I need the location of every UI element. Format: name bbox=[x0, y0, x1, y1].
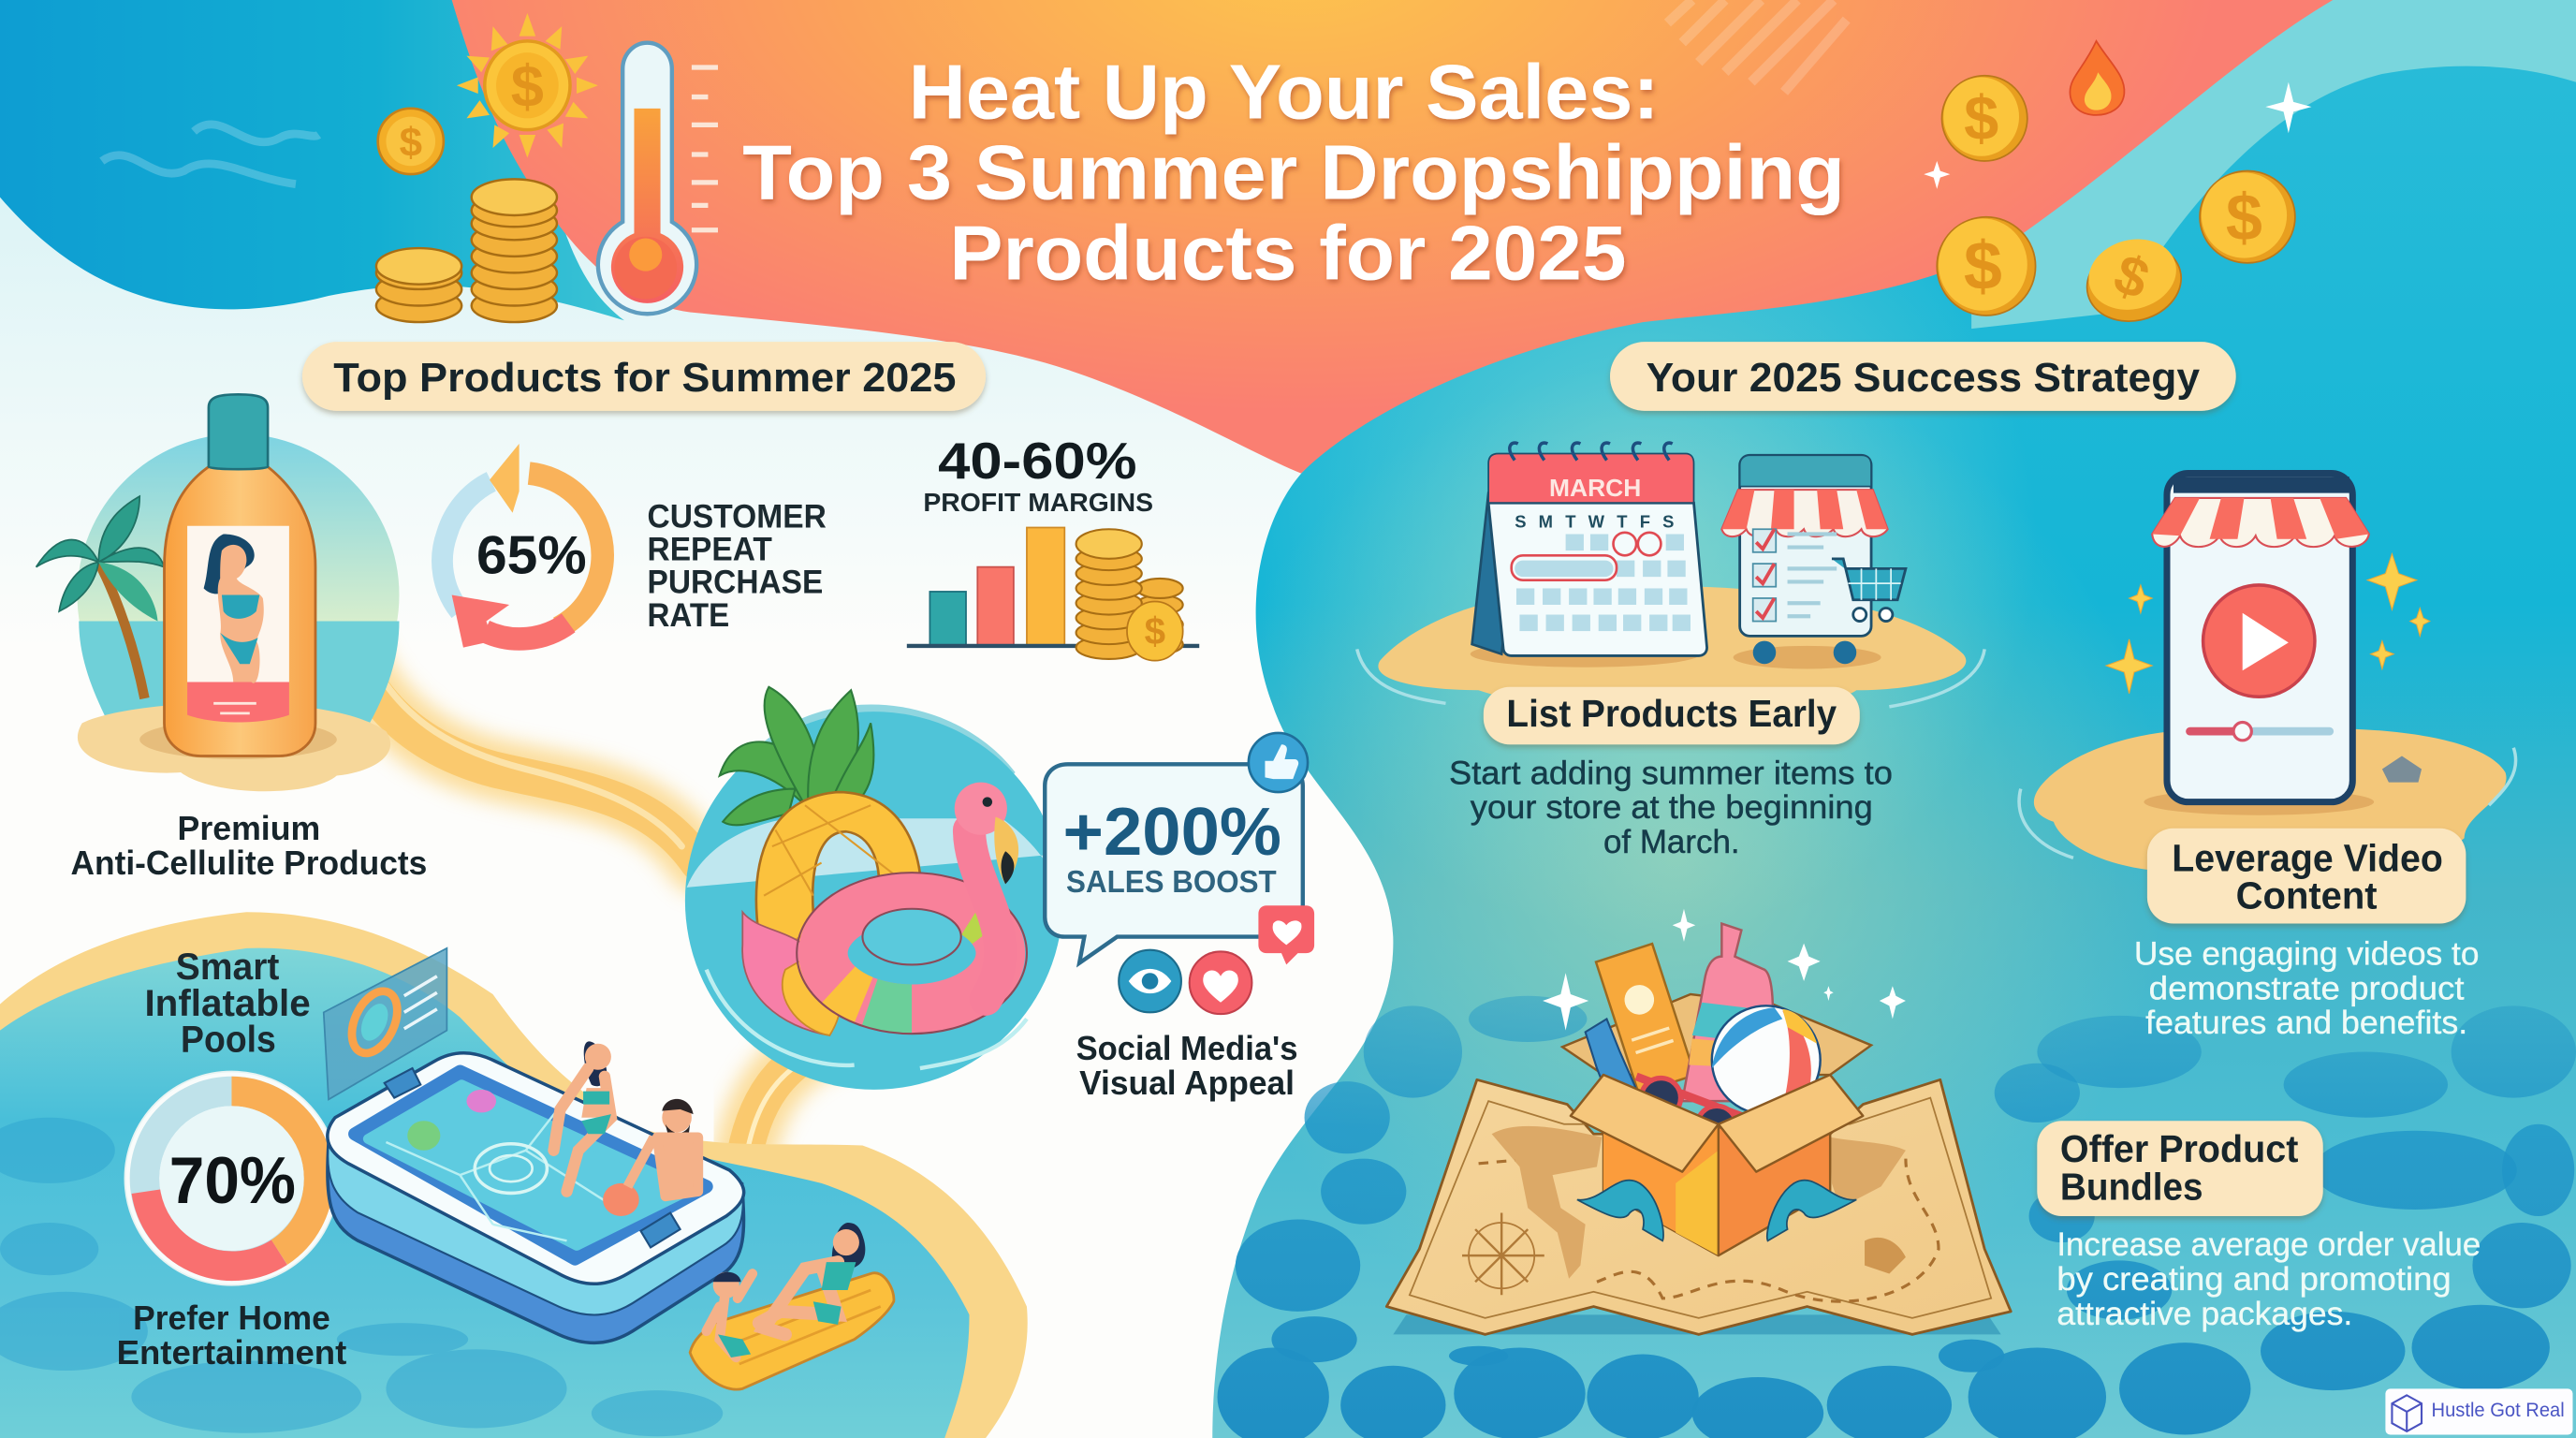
island bbox=[2034, 728, 2507, 873]
icon: falling gold coins: $ bbox=[1964, 227, 2002, 304]
text: list products description: your store at the beginning bbox=[1471, 789, 1873, 826]
dashed route bbox=[1479, 1159, 1939, 1301]
text: social media visual appeal: Social Media's bbox=[1076, 1029, 1298, 1067]
heading: top products: Top Products for Summer 2025 bbox=[333, 355, 956, 401]
illustration: inflatable pool with people bbox=[328, 1041, 894, 1389]
video slider bbox=[2190, 729, 2243, 734]
watermark badge bbox=[2385, 1388, 2572, 1434]
text: leverage video description: demonstrate product bbox=[2149, 970, 2465, 1006]
label: offer product bundles: Offer Product bbox=[2060, 1127, 2298, 1170]
callout: sales boost speech bubble: SALES BOOST bbox=[1066, 865, 1277, 900]
text: leverage video description: features and benefits. bbox=[2145, 1005, 2467, 1041]
control modules bbox=[385, 1068, 420, 1098]
icon: thermometer bbox=[598, 43, 718, 314]
store wheels bbox=[1753, 641, 1776, 664]
blue bottle bbox=[1586, 1019, 1656, 1151]
calendar page bbox=[1488, 503, 1707, 655]
text: customer repeat purchase rate: RATE bbox=[648, 597, 729, 634]
heading: success strategy bbox=[1610, 342, 2236, 411]
chart: 70% donut bbox=[124, 1072, 339, 1285]
pineapple ring bbox=[756, 792, 921, 986]
colored wing bbox=[742, 912, 840, 1035]
text: offer bundles description: by creating and promoting bbox=[2056, 1261, 2452, 1298]
ribbons bbox=[1577, 1181, 1663, 1240]
label: leverage video content: Content bbox=[2236, 874, 2378, 917]
text: offer bundles description bbox=[2056, 1226, 2481, 1332]
panel: right ocean background bbox=[1212, 0, 2576, 1438]
inflatable rim bbox=[328, 1053, 744, 1284]
calendar day cells bbox=[1515, 535, 1690, 631]
box back flaps bbox=[1562, 994, 1871, 1075]
island bbox=[1378, 586, 1966, 711]
label: list products early bbox=[1484, 687, 1860, 744]
sand island bbox=[78, 702, 390, 791]
callout: sales boost speech bubble: +200% bbox=[1063, 795, 1281, 870]
label: offer product bundles: Bundles bbox=[2060, 1165, 2203, 1208]
icon: flame bbox=[2070, 41, 2124, 115]
illustration: calendar and store on island: MARCH bbox=[1549, 474, 1641, 502]
checklist bbox=[1753, 529, 1776, 622]
treasure map bbox=[1386, 1079, 2011, 1334]
yellow lounger bbox=[690, 1273, 894, 1389]
text: social media visual appeal: Visual Appeal bbox=[1079, 1064, 1295, 1102]
pineapple leaves bbox=[720, 687, 873, 825]
text: prefer home entertainment bbox=[117, 1299, 346, 1372]
icon: falling gold coins bbox=[1937, 76, 2295, 331]
bottle label bbox=[187, 526, 289, 682]
icon: thumbs up bbox=[1249, 733, 1308, 792]
store page bbox=[1740, 455, 1871, 636]
water cells bbox=[0, 1118, 723, 1436]
watermark badge: Hustle Got Real bbox=[2432, 1400, 2565, 1421]
icon: heart message bbox=[1258, 905, 1314, 964]
man on pool edge bbox=[662, 1103, 692, 1132]
illustration: smart pool dashboard bbox=[324, 948, 446, 1099]
calendar rings bbox=[1510, 443, 1673, 461]
shopping cart bbox=[1832, 559, 1906, 600]
box front flaps bbox=[1571, 1075, 1719, 1172]
map shadow bbox=[1393, 1314, 2001, 1334]
illustration: pineapple and flamingo floats bbox=[685, 687, 1063, 1090]
pool water surface bbox=[368, 1085, 690, 1246]
text: customer repeat purchase rate: PURCHASE bbox=[648, 565, 823, 601]
text: customer repeat purchase rate: CUSTOMER bbox=[648, 498, 827, 535]
bottle body bbox=[165, 467, 315, 756]
icon: sun coin: $ bbox=[511, 54, 544, 120]
label: leverage video content bbox=[2147, 829, 2466, 924]
chart: profit bars with coins: $ bbox=[1145, 609, 1165, 653]
phone body bbox=[2167, 474, 2352, 802]
label: list products early: List Products Early bbox=[1506, 692, 1837, 735]
white sparkles bbox=[1543, 909, 1906, 1031]
text: smart inflatable pools: Pools bbox=[181, 1019, 276, 1060]
sunglasses bbox=[1636, 1077, 1745, 1118]
icon: falling gold coins: $ bbox=[1964, 84, 1998, 154]
water circle bbox=[736, 704, 1016, 797]
text: list products description bbox=[1449, 755, 1893, 860]
map continents bbox=[1492, 1126, 1602, 1279]
palm bbox=[98, 562, 144, 698]
icon: single coin: $ bbox=[400, 120, 422, 166]
figure on label bbox=[204, 535, 255, 594]
store awning bbox=[1721, 490, 1888, 536]
title: Top 3 Summer Dropshipping bbox=[742, 129, 1845, 215]
text: customer repeat purchase rate: REPEAT bbox=[648, 532, 772, 568]
text: leverage video description bbox=[2134, 935, 2479, 1041]
child on lounger bbox=[713, 1272, 739, 1299]
icon: sun coin bbox=[457, 13, 598, 158]
backdrop circle bbox=[77, 433, 399, 756]
text: premium products: Anti-Cellulite Products bbox=[70, 844, 427, 882]
text: profit margins bbox=[923, 433, 1153, 517]
text: offer bundles description: Increase average order value bbox=[2056, 1226, 2481, 1263]
woman on lounger bbox=[832, 1223, 865, 1269]
gold sparkles bbox=[2106, 554, 2430, 694]
beach ball bbox=[1712, 1005, 1821, 1114]
icon: eye bbox=[1119, 950, 1181, 1012]
chart: profit bars with coins bbox=[907, 527, 1199, 661]
label: leverage video content: Leverage Video bbox=[2172, 836, 2443, 879]
compass bbox=[1462, 1213, 1544, 1295]
illustration: calendar and store on island bbox=[1357, 443, 1984, 711]
icon: heart bbox=[1190, 951, 1251, 1014]
box body bbox=[1603, 1127, 1830, 1255]
panel: left pool water and beach bbox=[0, 912, 1028, 1438]
text: prefer home entertainment: Prefer Home bbox=[133, 1299, 330, 1337]
heading: success strategy: Your 2025 Success Strategy bbox=[1647, 355, 2201, 401]
icon: coin stacks bbox=[376, 179, 557, 322]
glowing sand stream bbox=[337, 600, 838, 1167]
text: list products description: of March. bbox=[1603, 824, 1740, 860]
icon: falling gold coins: $ bbox=[2106, 242, 2157, 311]
text: smart inflatable pools bbox=[144, 946, 311, 1060]
pool lights bbox=[407, 1121, 440, 1151]
text: premium products bbox=[70, 809, 427, 882]
pool ripples bbox=[707, 970, 1027, 1068]
awning bbox=[2152, 498, 2369, 547]
pink bottle bbox=[1682, 924, 1773, 1101]
panel: coral sun banner bbox=[452, 0, 2333, 474]
calendar header bbox=[1488, 453, 1694, 503]
illustration: bundle box on treasure map bbox=[1386, 909, 2011, 1334]
illustration: sunscreen bottle on beach bbox=[37, 394, 399, 791]
label: offer product bundles bbox=[2037, 1121, 2323, 1216]
icon: single coin bbox=[378, 109, 444, 174]
panel: top-left blue wave bbox=[0, 0, 624, 320]
wave marks bbox=[102, 125, 318, 184]
flamingo neck and head bbox=[970, 829, 1001, 999]
sunscreen tube bbox=[1596, 944, 1695, 1093]
icon: sparkles top right bbox=[1924, 82, 2311, 189]
decorative stripes bbox=[1667, 0, 1847, 92]
illustration: phone with video on island bbox=[2019, 474, 2516, 873]
water cell pattern right bbox=[1218, 996, 2576, 1438]
text: list products description: Start adding summer items to bbox=[1449, 755, 1893, 791]
text: customer repeat purchase rate bbox=[648, 498, 827, 634]
inflatable ring bbox=[823, 897, 1001, 1009]
icon: falling gold coins: $ bbox=[2226, 180, 2262, 254]
text: leverage video description: Use engaging videos to bbox=[2134, 935, 2479, 972]
pool base bbox=[328, 1060, 744, 1343]
text: prefer home entertainment: Entertainment bbox=[117, 1333, 346, 1372]
woman on pool edge bbox=[584, 1041, 607, 1086]
title bbox=[742, 49, 1845, 296]
chart: 65% repeat arrow ring bbox=[442, 444, 603, 648]
bottle cap bbox=[209, 394, 268, 469]
title: Heat Up Your Sales: bbox=[909, 49, 1660, 135]
chart: 65% repeat arrow ring: 65% bbox=[476, 526, 587, 586]
text: smart inflatable pools: Inflatable bbox=[144, 983, 311, 1024]
title: Products for 2025 bbox=[949, 210, 1627, 296]
callout: sales boost speech bubble bbox=[1045, 764, 1303, 963]
text: profit margins: 40-60% bbox=[938, 433, 1137, 490]
play button bbox=[2203, 585, 2315, 697]
chart: 70% donut: 70% bbox=[169, 1143, 296, 1217]
text: social media visual appeal bbox=[1076, 1029, 1298, 1102]
calendar back bbox=[1472, 493, 1519, 654]
text: offer bundles description: attractive packages. bbox=[2056, 1296, 2352, 1332]
text: smart inflatable pools: Smart bbox=[176, 946, 279, 988]
highlighted dates bbox=[1512, 533, 1661, 580]
weekday row: S M T W T F S bbox=[1515, 511, 1674, 531]
heading: top products bbox=[302, 342, 986, 411]
text: premium products: Premium bbox=[178, 809, 320, 847]
text: profit margins: PROFIT MARGINS bbox=[923, 488, 1153, 517]
